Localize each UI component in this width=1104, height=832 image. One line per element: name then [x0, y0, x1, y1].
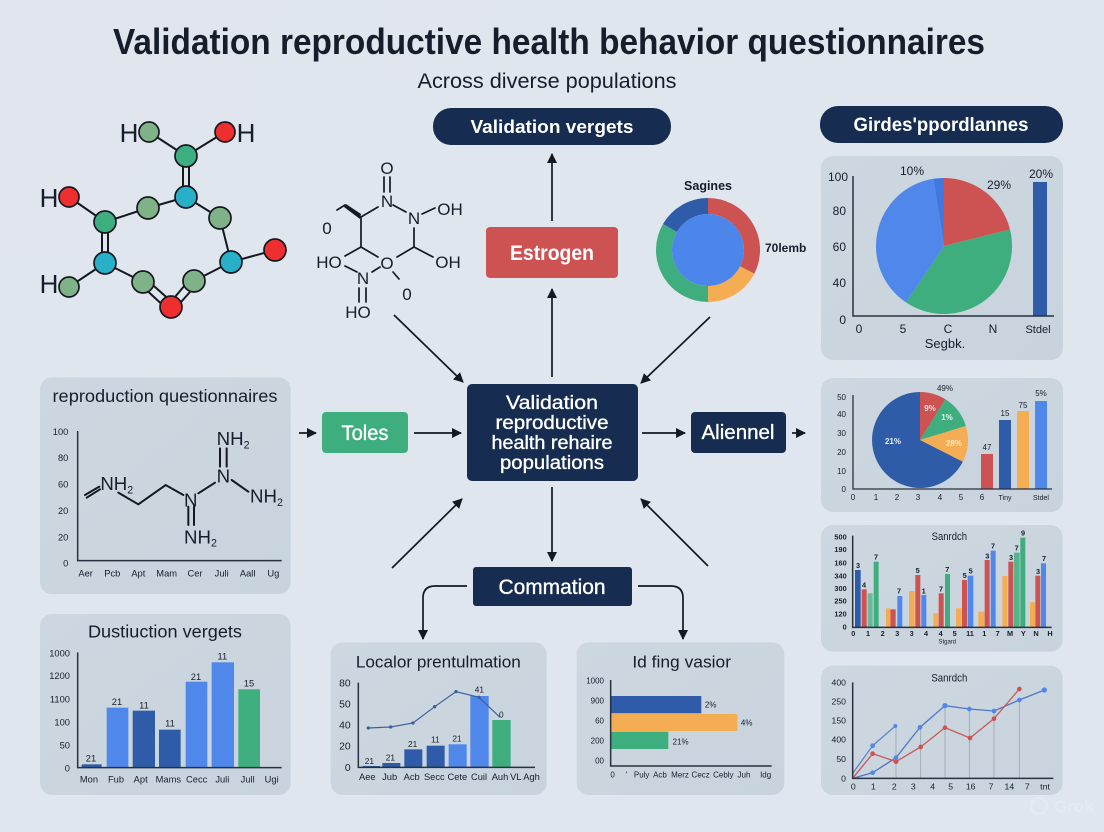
axes and labels: 5 — [916, 566, 920, 575]
pill: validation vergets: Validation vergets — [470, 117, 634, 137]
line chart axes with labels: 20 — [58, 506, 68, 516]
box: commation: Commation — [498, 576, 606, 599]
box: center node: Validation — [506, 393, 598, 414]
molecule: skeletal structure: 0 — [322, 219, 332, 238]
panel heading: reproduction questionnaires — [52, 386, 278, 406]
arrow: center to estrogen — [551, 289, 553, 377]
axes and labels: 4 — [924, 629, 929, 638]
axes and labels — [828, 164, 1054, 351]
chemical chain diagram: NH — [250, 486, 277, 507]
axes and labels: Jub — [382, 772, 397, 782]
axes and labels — [586, 677, 772, 779]
axes and labels: 120 — [834, 609, 847, 618]
axes and labels: 16 — [966, 781, 976, 791]
axes and labels: 7 — [991, 542, 995, 551]
pill: guidelines header: Girdes'ppordlannes — [854, 115, 1028, 136]
axes and labels: 21 — [408, 739, 418, 749]
axes and labels: 0 — [345, 763, 351, 774]
box: center node: reproductive — [496, 413, 608, 434]
axes and labels: 3 — [910, 629, 914, 638]
arrow: commation to left panel — [423, 586, 467, 639]
axes and labels: 1000 — [49, 649, 70, 659]
molecule: skeletal structure: N — [381, 192, 393, 211]
axes and labels: VL Agh — [510, 772, 540, 782]
axes and labels: 7 — [1025, 781, 1030, 791]
axes and labels: Cecc — [186, 775, 208, 785]
line chart axes with labels: Aall — [240, 569, 255, 579]
axes and labels: 9 — [1021, 529, 1025, 538]
molecule: colored ball and stick — [40, 118, 286, 318]
single bar — [1033, 182, 1047, 316]
arrow: toles to center — [414, 432, 461, 434]
axes and labels: 7 — [996, 629, 1000, 638]
axes and labels: 1 — [982, 629, 986, 638]
box: aliennel — [691, 412, 786, 453]
axes and labels: 21 — [365, 756, 374, 766]
pie chart — [876, 178, 1012, 314]
axes and labels: Stdel — [1033, 495, 1049, 502]
box: center node: populations — [500, 453, 604, 474]
axes and labels: Auh — [492, 772, 508, 782]
axes and labels: 5 — [963, 571, 967, 580]
box: estrogen — [486, 227, 618, 278]
axes and labels: 3 — [1036, 567, 1040, 576]
axes and labels: 21% — [673, 737, 689, 746]
axes and labels: 21 — [191, 672, 201, 682]
arrow: lower left to center — [392, 499, 462, 568]
axes and labels: 190 — [834, 545, 847, 554]
axes and labels: 1000 — [586, 677, 605, 686]
watermark — [1031, 797, 1094, 816]
donut chart — [664, 179, 806, 294]
axes and labels: 150 — [832, 716, 846, 726]
axes and labels: 3 — [911, 781, 916, 791]
axes and labels: 30 — [837, 429, 847, 438]
axes and labels — [837, 384, 1052, 502]
panel: pie and bar chart top right — [821, 156, 1063, 360]
molecule: skeletal structure: OH — [435, 253, 461, 272]
axes and labels: 80 — [339, 679, 351, 690]
pie chart with slices: 28% — [946, 439, 962, 448]
pie chart with slices: 1% — [941, 413, 953, 422]
axes and labels: Jull — [241, 775, 255, 785]
axes and labels — [832, 678, 1053, 791]
axes and labels: Y — [1021, 629, 1026, 638]
axes and labels: 21 — [386, 752, 395, 762]
axes and labels: 2% — [705, 701, 716, 710]
axes and labels: Mams — [156, 775, 181, 785]
box: toles — [322, 412, 408, 453]
axes and labels: 5 — [959, 493, 964, 502]
line chart axes with labels: 0 — [63, 559, 68, 569]
axes and labels: Acb — [653, 770, 667, 779]
axes and labels: 1100 — [50, 694, 70, 704]
axes and labels: 6 — [980, 493, 985, 502]
axes and labels: Acb — [404, 772, 420, 782]
panel heading: Localor prentulmation — [356, 652, 521, 671]
axes and labels: 7 — [939, 585, 943, 594]
arrow: aliennel out — [792, 432, 805, 434]
axes and labels: 1200 — [49, 671, 70, 681]
axes and labels: 400 — [832, 735, 846, 745]
molecule: skeletal structure — [316, 159, 463, 322]
chemical chain diagram: NH — [184, 526, 211, 547]
axes and labels: 00 — [595, 757, 605, 766]
axes and labels: Puly — [634, 770, 649, 779]
molecule: skeletal structure: HO — [345, 303, 371, 322]
axes and labels — [339, 679, 540, 782]
axes and labels: 0 — [842, 485, 847, 494]
axes and labels: 50 — [60, 741, 70, 751]
axes and labels: 3 — [895, 629, 899, 638]
axes and labels: 100 — [54, 717, 70, 727]
chemical chain diagram: N — [217, 466, 230, 487]
molecule: skeletal structure: OH — [437, 200, 463, 219]
axes and labels: 7 — [945, 565, 949, 574]
axes and labels: 75 — [1019, 401, 1028, 410]
axes and labels: Juh — [738, 770, 750, 779]
molecule: skeletal structure: O — [380, 159, 394, 178]
axes and labels: Stgard — [939, 640, 956, 646]
axes and labels: 7 — [874, 552, 878, 561]
panel: id fing vasior horizontal bars — [577, 642, 784, 795]
subtitle: Across diverse populations — [418, 70, 676, 93]
axes and labels: 0 — [839, 313, 846, 327]
box: commation — [473, 567, 632, 606]
axes and labels: 2 — [895, 493, 900, 502]
panel: reproduction questionnaires — [40, 377, 291, 594]
axes and labels: 21 — [112, 697, 122, 707]
donut chart: Sagines — [684, 179, 732, 193]
axes and labels: Merz — [671, 770, 689, 779]
axes and labels: 0 — [851, 781, 856, 791]
chemical chain diagram — [85, 428, 283, 550]
axes and labels: Cecz — [692, 770, 710, 779]
axes and labels: 300 — [834, 584, 847, 593]
box: toles: Toles — [342, 422, 388, 445]
axes and labels: N — [1033, 629, 1039, 638]
axes and labels: N — [989, 322, 997, 336]
line chart axes with labels: Ug — [267, 569, 279, 579]
axes and labels: 47 — [983, 443, 992, 452]
box: center node — [467, 384, 638, 481]
axes and labels: Cete — [447, 772, 467, 782]
axes and labels: 4 — [862, 581, 867, 590]
axes and labels: 1 — [922, 586, 926, 595]
axes and labels: 400 — [832, 678, 846, 688]
line chart axes with labels: 60 — [58, 480, 68, 490]
axes and labels: 5 — [900, 322, 907, 336]
axes and labels: 500 — [834, 532, 847, 541]
panel heading: Dustiuction vergets — [88, 622, 242, 642]
axes and labels: Juli — [215, 775, 229, 785]
axes and labels: 10 — [837, 467, 847, 476]
molecule: skeletal structure: O — [380, 254, 394, 273]
box: center node: health rehaire — [492, 433, 612, 454]
arrow: estrogen to validation — [551, 154, 553, 221]
axes and labels: 11 — [139, 700, 149, 710]
axes and labels: 21 — [86, 754, 96, 764]
pill: validation vergets — [433, 108, 671, 145]
axes and labels: 50 — [836, 754, 846, 764]
axes and labels: 2 — [892, 781, 897, 791]
axes and labels: 49% — [937, 384, 953, 393]
axes and labels: 10% — [900, 164, 924, 178]
arrow: molecule to center — [394, 315, 463, 382]
axes and labels: 11 — [217, 651, 227, 661]
axes and labels: 340 — [834, 571, 847, 580]
bars — [981, 401, 1047, 489]
axes and labels: Tiny — [999, 495, 1012, 502]
line chart axes with labels: Mam — [156, 569, 177, 579]
axes and labels: 40 — [837, 410, 847, 419]
panel: multi-line chart — [821, 666, 1063, 795]
line chart axes with labels: 80 — [58, 453, 68, 463]
axes and labels: 21 — [452, 733, 462, 743]
axes and labels: Cuil — [471, 772, 487, 782]
axes and labels: 15 — [1001, 409, 1010, 418]
axes and labels: 15 — [244, 679, 254, 689]
axes and labels: H — [1047, 629, 1053, 638]
arrow: into toles — [299, 432, 316, 434]
axes and labels: Apt — [134, 775, 148, 785]
axes and labels: 100 — [828, 170, 848, 184]
axes and labels: 7 — [1015, 544, 1019, 553]
axes and labels: 5 — [969, 567, 973, 576]
molecule: colored ball and stick: H — [40, 183, 58, 213]
axes and labels: 29% — [987, 178, 1011, 192]
axes and labels: 7 — [1042, 554, 1046, 563]
axes and labels: 160 — [834, 558, 847, 567]
axes and labels: M — [1007, 629, 1013, 638]
axes and labels: 0 — [841, 774, 846, 784]
line chart axes with labels — [53, 427, 282, 579]
molecule: colored ball and stick: H — [120, 118, 138, 148]
axes and labels: Segbk. — [925, 336, 965, 351]
axes and labels: 5 — [948, 781, 953, 791]
chemical chain diagram: NH — [217, 428, 244, 449]
molecule: skeletal structure: 0 — [402, 285, 412, 304]
axes and labels: 11 — [966, 629, 974, 638]
molecule: skeletal structure: HO — [316, 253, 342, 272]
axes and labels: 0 — [856, 322, 863, 336]
axes and labels: ' — [626, 770, 628, 779]
arrow: center to aliennel — [642, 432, 685, 434]
axes and labels: Stdel — [1025, 324, 1051, 336]
panel heading: Id fing vasior — [632, 652, 731, 671]
axes and labels: 20 — [339, 742, 351, 753]
axes and labels: tnt — [1040, 781, 1050, 791]
chart heading: Sanrdch — [931, 672, 967, 684]
axes and labels: 1 — [874, 493, 879, 502]
arrow: center to commation — [551, 487, 553, 561]
axes and labels: 20 — [837, 448, 847, 457]
box: aliennel: Aliennel — [702, 422, 774, 444]
chemical chain diagram: 2 — [211, 538, 217, 550]
pie chart with slices — [872, 392, 968, 488]
molecule: colored ball and stick: H — [40, 269, 58, 299]
axes and labels: Secc — [424, 772, 445, 782]
axes and labels: 60 — [833, 240, 846, 254]
axes and labels: Ugi — [265, 775, 279, 785]
line chart axes with labels: 20 — [58, 532, 68, 542]
box: estrogen: Estrogen — [510, 242, 594, 265]
line chart axes with labels: Aer — [78, 569, 93, 579]
line chart axes with labels: 100 — [53, 427, 68, 437]
axes and labels: Mon — [80, 775, 98, 785]
panel: localor prentulmation combo chart — [331, 642, 547, 795]
axes and labels: 4 — [938, 493, 943, 502]
axes and labels: 41 — [475, 684, 484, 694]
axes and labels: 4 — [930, 781, 935, 791]
line chart axes with labels: Cer — [187, 569, 203, 579]
axes and labels: 50 — [339, 699, 351, 710]
line series — [853, 687, 1047, 778]
watermark: Grok — [1054, 797, 1094, 816]
arrow: lower right to center — [641, 499, 708, 566]
axes and labels: 11 — [165, 719, 175, 729]
pie chart with slices: 21% — [885, 437, 901, 446]
axes and labels: Cebly — [713, 770, 734, 779]
axes and labels: 7 — [989, 781, 994, 791]
title: Validation reproductive health behavior questionnaires — [113, 21, 985, 62]
axes and labels: 7 — [897, 586, 901, 595]
axes and labels: 40 — [833, 276, 846, 290]
axes and labels: 11 — [431, 734, 440, 744]
panel: pie and bars second right — [821, 378, 1063, 512]
axes and labels: 0 — [851, 629, 855, 638]
axes and labels: 250 — [834, 597, 847, 606]
axes and labels: 0 — [65, 764, 70, 774]
chemical chain diagram: N — [184, 490, 197, 511]
axes and labels: 4 — [939, 629, 944, 638]
axes and labels: 0 — [610, 770, 615, 779]
axes and labels: C — [944, 322, 953, 336]
axes and labels: 0 — [843, 622, 847, 631]
axes and labels: 250 — [832, 696, 846, 706]
pill: guidelines header — [820, 106, 1063, 143]
arrow: donut to center — [641, 317, 710, 383]
trend line — [367, 690, 500, 730]
axes and labels: 60 — [595, 717, 605, 726]
line chart axes with labels: Apt — [131, 569, 146, 579]
axes and labels: 3 — [1009, 553, 1013, 562]
donut chart: 70lemb — [765, 241, 806, 255]
axes and labels: 20% — [1029, 167, 1053, 181]
axes and labels: 200 — [591, 737, 605, 746]
chart heading: Sanrdch — [932, 531, 967, 543]
pie chart with slices: 9% — [924, 404, 936, 413]
molecule: skeletal structure: N — [357, 269, 369, 288]
chemical chain diagram: 2 — [277, 497, 283, 509]
axes and labels: 80 — [833, 204, 846, 218]
chemical chain diagram: 2 — [127, 484, 133, 496]
panel: grouped bar chart — [821, 525, 1063, 652]
axes and labels: 40 — [339, 720, 351, 731]
guide lines — [896, 700, 1019, 778]
axes and labels — [49, 649, 282, 785]
axes and labels: 3 — [916, 493, 921, 502]
horizontal bars — [611, 696, 737, 749]
axes and labels: 5 — [953, 629, 957, 638]
panel: dustiuction vergets bar chart — [40, 614, 291, 795]
molecule: skeletal structure: N — [408, 209, 420, 228]
axes and labels: Idg — [760, 770, 771, 779]
arrow: commation to right panel — [638, 586, 683, 639]
bars — [82, 662, 260, 768]
axes and labels: 2 — [881, 629, 885, 638]
axes and labels: 3 — [856, 561, 860, 570]
axes and labels: 1 — [871, 781, 876, 791]
axes and labels — [834, 529, 1053, 646]
chemical chain diagram: 2 — [244, 439, 250, 451]
grouped bars — [855, 538, 1046, 627]
axes and labels: 3 — [985, 551, 989, 560]
bars — [363, 696, 511, 767]
axes and labels: 1 — [866, 629, 870, 638]
molecule: colored ball and stick: H — [237, 118, 255, 148]
axes and labels: Aee — [359, 772, 376, 782]
line chart axes with labels: Juli — [215, 569, 229, 579]
axes and labels: 4% — [741, 719, 752, 728]
axes and labels: 14 — [1005, 781, 1014, 791]
axes and labels: 5% — [1035, 389, 1047, 398]
chemical chain diagram: NH — [100, 473, 127, 494]
axes and labels: 50 — [837, 393, 847, 402]
line chart axes with labels: Pcb — [104, 569, 120, 579]
axes and labels: 900 — [591, 697, 605, 706]
axes and labels: Fub — [108, 775, 124, 785]
axes and labels: 0 — [851, 493, 856, 502]
axes and labels: 0 — [499, 710, 504, 720]
